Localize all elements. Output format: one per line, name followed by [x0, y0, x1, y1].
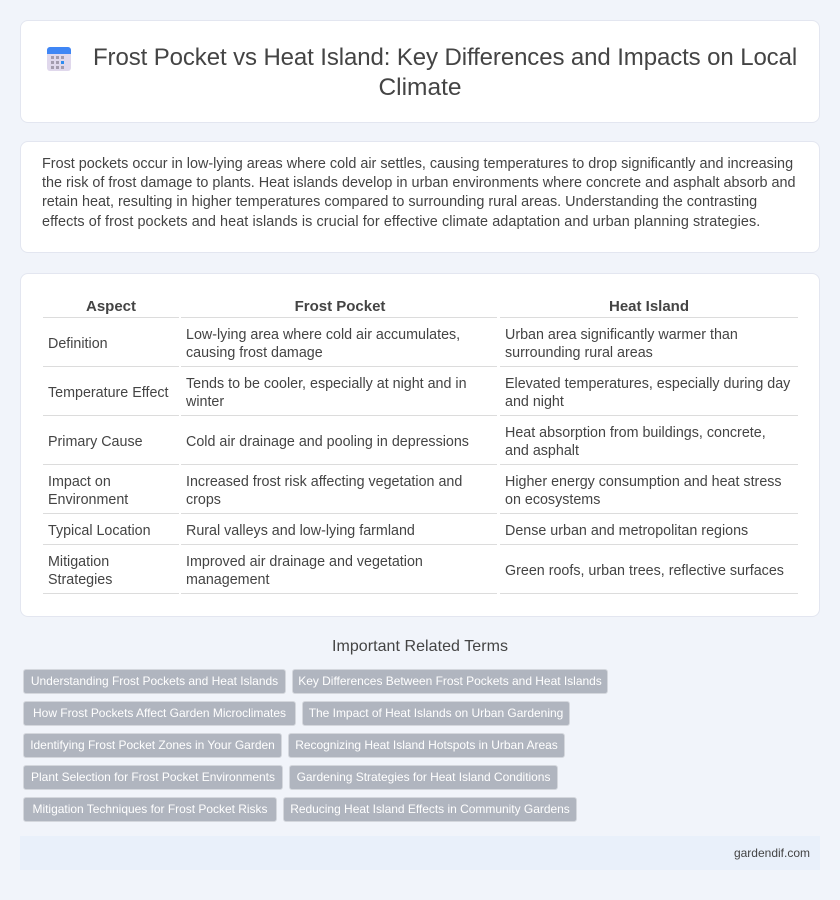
- row: definition: surrounding rural areas: [505, 345, 653, 361]
- tag: [292, 669, 608, 694]
- row: temperature effect: and night: [505, 394, 564, 410]
- table header: Heat Island: [609, 298, 689, 315]
- tag: [23, 765, 283, 790]
- row: definition: Definition: [48, 336, 108, 352]
- related terms tags: [23, 669, 608, 822]
- tag: The Impact of Heat Islands on Urban Gardening: [309, 706, 563, 720]
- tag: [302, 701, 570, 726]
- row: impact on environment: on ecosystems: [505, 492, 600, 508]
- tag: Reducing Heat Island Effects in Community Gardens: [290, 802, 570, 816]
- table header: Frost Pocket: [295, 298, 385, 315]
- related terms heading: Important Related Terms: [332, 638, 508, 655]
- tag: Identifying Frost Pocket Zones in Your Garden: [30, 738, 275, 752]
- row: definition: Low-lying area where cold air accumulates,: [186, 327, 460, 343]
- footer site name: gardendif.com: [734, 846, 810, 860]
- row: impact on environment: Impact on: [48, 474, 111, 490]
- row: primary cause: Primary Cause: [48, 434, 143, 450]
- row: typical location: Typical Location: [48, 523, 151, 539]
- row: temperature effect: winter: [186, 394, 224, 410]
- row: typical location: Dense urban and metropolitan regions: [505, 523, 748, 539]
- title card: [20, 20, 820, 123]
- row: impact on environment: Environment: [48, 492, 128, 508]
- row: impact on environment: crops: [186, 492, 221, 508]
- tag: [288, 733, 565, 758]
- intro paragraph: effects of frost pockets and heat islands is crucial for effective climate adaptation and urban planning strategies.: [42, 214, 760, 230]
- row: temperature effect: Temperature Effect: [48, 385, 169, 401]
- comparison table panel: [20, 273, 820, 617]
- row: primary cause: [48, 425, 766, 459]
- row: mitigation strategies: Strategies: [48, 572, 112, 588]
- row: impact on environment: [48, 474, 782, 508]
- row: temperature effect: Tends to be cooler, especially at night and in: [186, 376, 467, 392]
- tag: Mitigation Techniques for Frost Pocket Risks: [32, 802, 268, 816]
- row: mitigation strategies: Mitigation: [48, 554, 109, 570]
- row: temperature effect: [48, 376, 790, 410]
- title: [93, 44, 797, 101]
- icon: calendar: [47, 47, 71, 71]
- tag: Key Differences Between Frost Pockets and Heat Islands: [298, 674, 602, 688]
- row: typical location: Rural valleys and low-lying farmland: [186, 523, 415, 539]
- row: mitigation strategies: management: [186, 572, 269, 588]
- row: mitigation strategies: [48, 554, 784, 588]
- tag: How Frost Pockets Affect Garden Microclimates: [33, 706, 286, 720]
- intro paragraph: Frost pockets occur in low-lying areas where cold air settles, causing temperatures to drop significantly and increasing: [42, 156, 793, 172]
- tag: Gardening Strategies for Heat Island Conditions: [297, 770, 550, 784]
- intro paragraph: retain heat, resulting in higher temperatures compared to surrounding rural areas. Understanding the contrasting: [42, 194, 757, 210]
- intro text panel: [20, 141, 820, 253]
- tag: [283, 797, 577, 822]
- row: primary cause: Cold air drainage and pooling in depressions: [186, 434, 469, 450]
- row: typical location: [48, 523, 748, 539]
- row: mitigation strategies: Improved air drainage and vegetation: [186, 554, 423, 570]
- row: temperature effect: Elevated temperatures, especially during day: [505, 376, 790, 392]
- row: mitigation strategies: Green roofs, urban trees, reflective surfaces: [505, 563, 784, 579]
- row: definition: Urban area significantly warmer than: [505, 327, 738, 343]
- table header: Aspect: [86, 298, 136, 315]
- tag: [23, 669, 286, 694]
- row: definition: causing frost damage: [186, 345, 323, 361]
- row: primary cause: and asphalt: [505, 443, 579, 459]
- tag: [289, 765, 558, 790]
- tag: [23, 701, 296, 726]
- title: Climate: [378, 74, 462, 101]
- table header: [86, 298, 689, 315]
- row: definition: [48, 327, 738, 361]
- footer bar: [20, 836, 820, 870]
- row: impact on environment: Increased frost risk affecting vegetation and: [186, 474, 462, 490]
- title: Frost Pocket vs Heat Island: Key Differences and Impacts on Local: [93, 44, 797, 71]
- tag: Plant Selection for Frost Pocket Environments: [31, 770, 275, 784]
- intro paragraph: [42, 156, 796, 230]
- tag: Recognizing Heat Island Hotspots in Urban Areas: [295, 738, 558, 752]
- intro paragraph: the risk of frost damage to plants. Heat islands develop in urban environments where concrete and asphalt absorb and: [42, 175, 796, 191]
- tag: [23, 733, 282, 758]
- row: primary cause: Heat absorption from buildings, concrete,: [505, 425, 766, 441]
- row: impact on environment: Higher energy consumption and heat stress: [505, 474, 782, 490]
- tag: Understanding Frost Pockets and Heat Islands: [31, 674, 278, 688]
- tag: [23, 797, 277, 822]
